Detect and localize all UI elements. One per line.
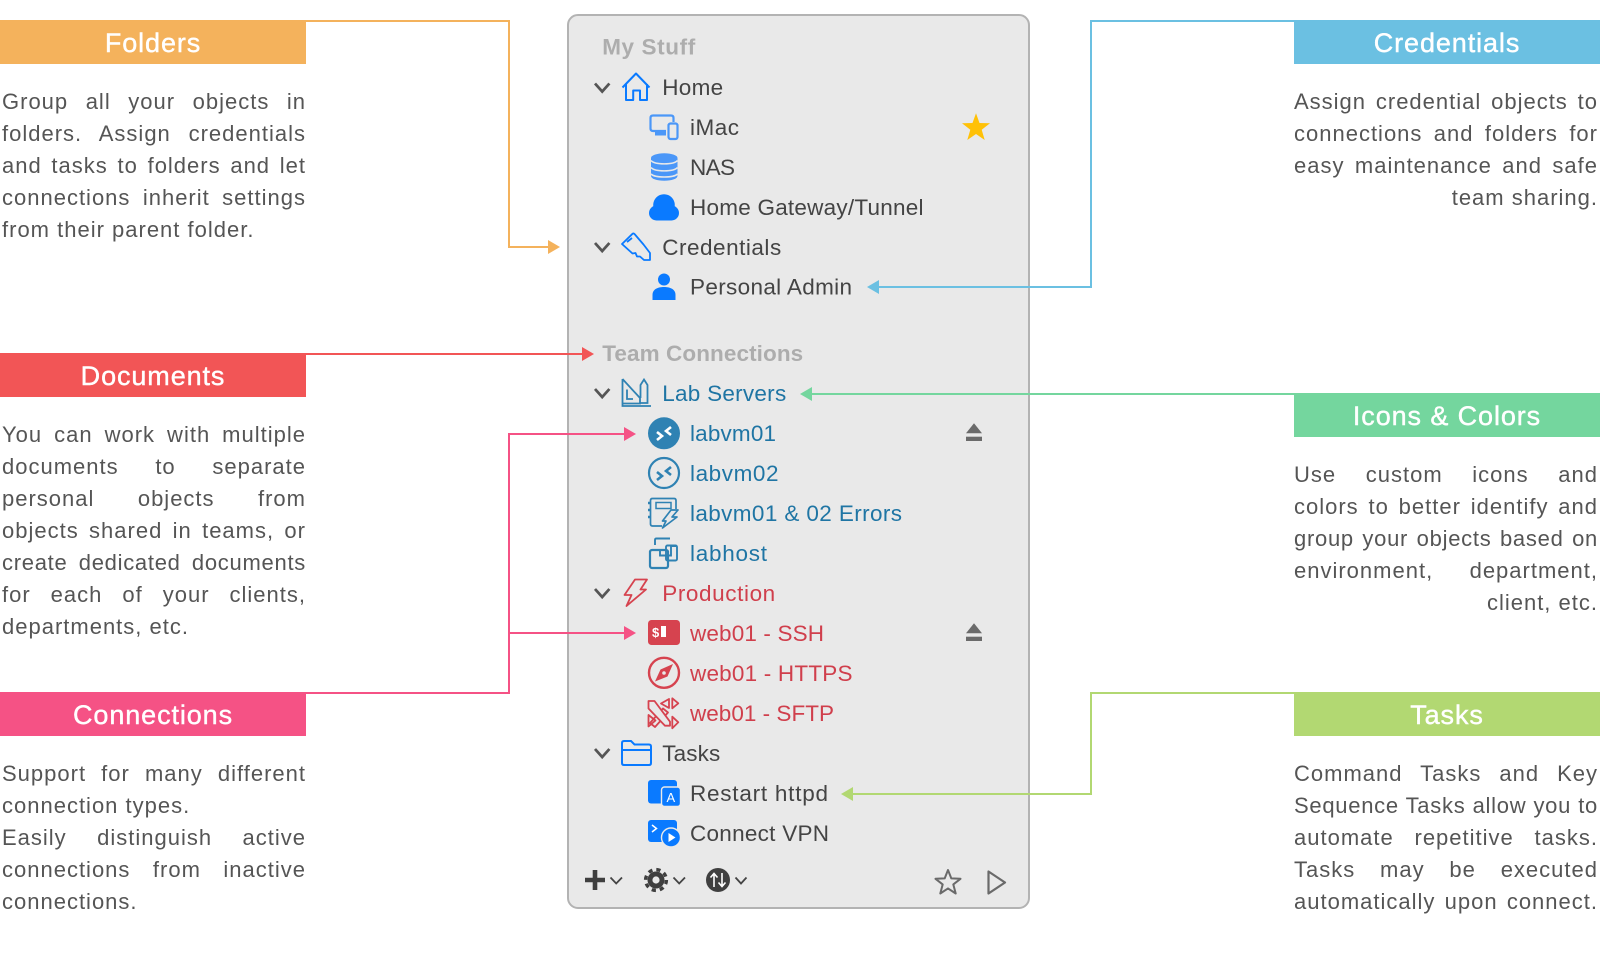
text: Tasks description: automatically upon connect. xyxy=(1294,889,1598,914)
panel: Icons & Colors xyxy=(1294,393,1600,615)
row: Tasks xyxy=(595,741,720,766)
panel: sidebar window xyxy=(568,15,1029,908)
row: Credentials xyxy=(595,233,781,260)
text: Connections description: Support for many different xyxy=(2,761,306,786)
row: labvm02 xyxy=(649,458,778,488)
text: Icons & Colors description: Use custom icons and xyxy=(1294,462,1598,487)
row: labvm01 xyxy=(648,417,982,449)
panel: Tasks xyxy=(1294,692,1600,914)
heading: Team Connections: Team Connections xyxy=(602,341,803,366)
text: Folders description xyxy=(2,89,306,242)
row: Home xyxy=(595,74,723,100)
heading: Icons & Colors xyxy=(1294,393,1600,437)
row: Tasks: Tasks xyxy=(662,741,720,766)
panel: Folders xyxy=(0,20,306,242)
text: Icons & Colors description: environment, department, xyxy=(1294,558,1598,583)
text: Tasks description: Command Tasks and Key xyxy=(1294,761,1598,786)
row: Connect VPN: Connect VPN xyxy=(690,821,829,846)
row: Restart httpd: Restart httpd xyxy=(690,781,828,806)
text: Documents description: departments, etc. xyxy=(2,614,189,639)
text: Documents description: documents to separate xyxy=(2,454,306,479)
heading: Tasks: Tasks xyxy=(1410,700,1484,730)
text: Icons & Colors description: colors to better identify and xyxy=(1294,494,1598,519)
toolbar: settings button xyxy=(646,870,685,890)
text: Connections description xyxy=(2,761,306,914)
arrow: Credentials connector xyxy=(867,21,1294,294)
arrow: Icons & Colors connector xyxy=(800,387,1294,401)
row: labvm01: labvm01 xyxy=(690,421,776,446)
icon: favorite star xyxy=(962,113,990,140)
row: Production xyxy=(595,580,775,606)
icon: eject active xyxy=(966,423,982,441)
heading: Icons & Colors: Icons & Colors xyxy=(1353,401,1541,431)
text: Icons & Colors description xyxy=(1294,462,1598,615)
row: Restart httpd: A xyxy=(666,790,676,805)
text: Folders description: connections inherit settings xyxy=(2,185,306,210)
row: labhost xyxy=(650,538,768,568)
row: web01 - SSH: $ xyxy=(652,625,660,640)
text: Folders description: Group all your objects in xyxy=(2,89,306,114)
toolbar: connect button xyxy=(988,872,1005,894)
panel: Credentials xyxy=(1294,20,1600,210)
toolbar: sync button xyxy=(706,868,746,892)
row: labvm02: labvm02 xyxy=(690,461,778,486)
text: Documents description: You can work with multiple xyxy=(2,422,306,447)
row: web01 - HTTPS: web01 - HTTPS xyxy=(689,661,852,686)
text: Documents description: create dedicated documents xyxy=(2,550,306,575)
text: Connections description: connections from inactive xyxy=(2,857,306,882)
row: labhost: labhost xyxy=(690,541,768,566)
heading: Connections xyxy=(0,692,306,736)
text: Folders description: from their parent folder. xyxy=(2,217,254,242)
text: Credentials description: Assign credential objects to xyxy=(1294,89,1598,114)
row: Home Gateway/Tunnel: Home Gateway/Tunnel xyxy=(690,195,924,220)
text: Connections description: Easily distinguish active xyxy=(2,825,306,850)
text: Documents description xyxy=(2,422,306,639)
heading: Folders xyxy=(0,20,306,64)
text: Documents description: for each of your clients, xyxy=(2,582,306,607)
text: Tasks description: automate repetitive tasks. xyxy=(1294,825,1598,850)
heading: Documents: Documents xyxy=(81,361,225,391)
text: Connections description: connection types. xyxy=(2,793,190,818)
text: Tasks description xyxy=(1294,761,1598,914)
text: Documents description: objects shared in teams, or xyxy=(2,518,306,543)
row: iMac xyxy=(650,113,990,140)
row: Production: Production xyxy=(662,581,775,606)
heading: Documents xyxy=(0,353,306,397)
toolbar: add button xyxy=(585,870,622,890)
row: NAS xyxy=(651,153,735,181)
text: Credentials description xyxy=(1294,89,1598,210)
row: Lab Servers xyxy=(595,379,786,406)
row: Home: Home xyxy=(662,75,723,100)
heading: Connections: Connections xyxy=(73,700,233,730)
arrow: Documents connector xyxy=(306,347,594,361)
row: web01 - SSH: web01 - SSH xyxy=(689,621,824,646)
arrow: Connections connector xyxy=(306,427,636,693)
text: Icons & Colors description: client, etc. xyxy=(1487,590,1598,615)
row: NAS: NAS xyxy=(690,155,735,180)
text: Credentials description: connections and folders for xyxy=(1294,121,1598,146)
row: web01 - HTTPS xyxy=(649,658,852,688)
heading: My Stuff: My Stuff xyxy=(602,34,696,60)
icon: eject active xyxy=(966,623,982,641)
row: iMac: iMac xyxy=(690,115,739,140)
text: Folders description: folders. Assign credentials xyxy=(2,121,306,146)
text: Credentials description: team sharing. xyxy=(1452,185,1598,210)
row: Credentials: Credentials xyxy=(662,235,781,260)
text: Folders description: and tasks to folders and let xyxy=(2,153,306,178)
row: Lab Servers: Lab Servers xyxy=(662,381,786,406)
arrow: Folders connector xyxy=(306,21,560,254)
row: web01 - SFTP xyxy=(648,698,834,728)
row: labvm01 & 02 Errors: labvm01 & 02 Errors xyxy=(690,501,902,526)
text: Icons & Colors description: group your objects based on xyxy=(1294,526,1598,551)
heading: Tasks xyxy=(1294,692,1600,736)
text: Credentials description: easy maintenance and safe xyxy=(1294,153,1598,178)
arrow: Tasks connector xyxy=(841,693,1294,801)
heading: Folders: Folders xyxy=(105,28,201,58)
text: Tasks description: Sequence Tasks allow you to xyxy=(1294,793,1598,818)
panel: Connections xyxy=(0,692,306,914)
panel: Documents xyxy=(0,353,306,639)
row: web01 - SSH xyxy=(648,620,982,646)
text: Documents description: personal objects from xyxy=(2,486,306,511)
row: web01 - SFTP: web01 - SFTP xyxy=(689,701,834,726)
text: Tasks description: Tasks may be executed xyxy=(1294,857,1598,882)
heading: Credentials xyxy=(1294,20,1600,64)
toolbar: favorite button xyxy=(936,870,960,894)
heading: Credentials: Credentials xyxy=(1374,28,1520,58)
text: Connections description: connections. xyxy=(2,889,138,914)
row: Personal Admin: Personal Admin xyxy=(690,275,852,300)
